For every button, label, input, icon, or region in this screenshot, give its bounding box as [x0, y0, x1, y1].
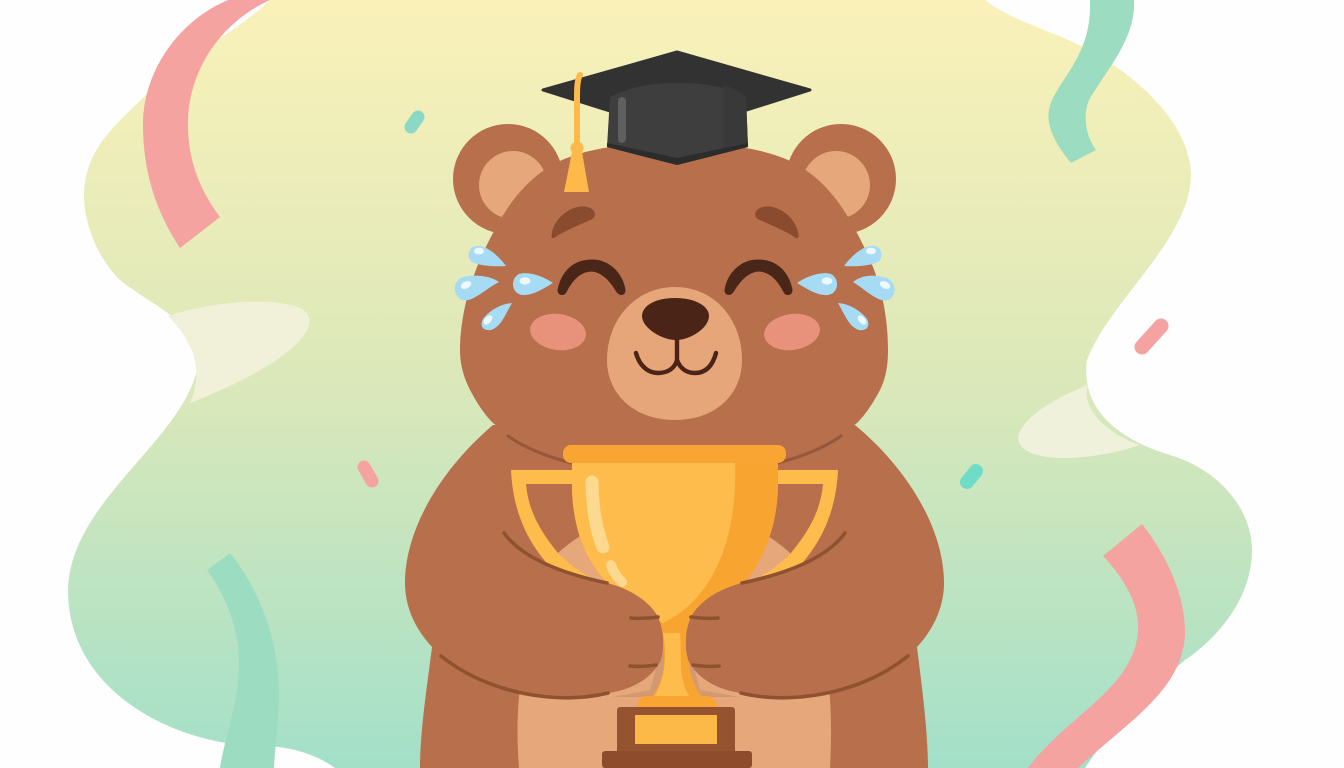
arm lines: [441, 533, 658, 698]
swoosh: right cream: [1018, 385, 1140, 458]
arm lines: [691, 533, 908, 698]
bear: [405, 124, 944, 768]
belly shadow around stem: [612, 630, 740, 697]
cap band: [607, 83, 748, 165]
tassel: [564, 75, 589, 192]
cup shade: [572, 462, 778, 625]
bear head: [460, 143, 888, 470]
right arm: [686, 533, 929, 698]
base cap: [637, 696, 717, 707]
bear belly: [518, 510, 831, 768]
plinth: [617, 707, 735, 753]
left eyebrow: [552, 207, 594, 238]
right eyebrow: [756, 207, 798, 238]
bear ears: [453, 124, 896, 234]
tears: right: [797, 246, 895, 330]
ribbon: top-right green: [1048, 0, 1134, 163]
large highlight: [592, 482, 603, 547]
left arm: [420, 533, 663, 698]
mouth: [636, 338, 716, 373]
base: [602, 751, 752, 768]
muzzle: [607, 287, 742, 420]
nose: [642, 298, 709, 340]
left handle: [511, 470, 592, 578]
cup front: [572, 462, 735, 623]
ribbon: bottom-right pink: [1028, 524, 1185, 768]
cap band lower edge: [607, 143, 748, 165]
neck crease lines: [508, 436, 841, 463]
left cheek: [528, 310, 588, 354]
stem: [652, 625, 702, 697]
right eye: [725, 260, 792, 294]
cap band shade: [723, 85, 748, 153]
small highlight: [611, 565, 622, 582]
right cheek: [762, 310, 822, 354]
bear body: [405, 425, 944, 768]
right handle: [757, 470, 838, 578]
rim: [563, 445, 786, 463]
arm shape: [420, 533, 663, 698]
swoosh: left cream: [168, 302, 310, 403]
left eye: [558, 260, 625, 294]
tears: left: [455, 246, 553, 330]
stem light: [654, 633, 690, 697]
ribbon: top-left pink: [143, 0, 270, 248]
plaque: [635, 715, 717, 744]
arm shape: [686, 533, 929, 698]
trophy: [511, 445, 838, 768]
cap highlight: [618, 101, 626, 139]
confetti pieces: [364, 117, 1161, 482]
cap board: [543, 52, 810, 132]
ribbon: bottom-left green: [207, 553, 279, 768]
graduation cap: [543, 52, 810, 192]
